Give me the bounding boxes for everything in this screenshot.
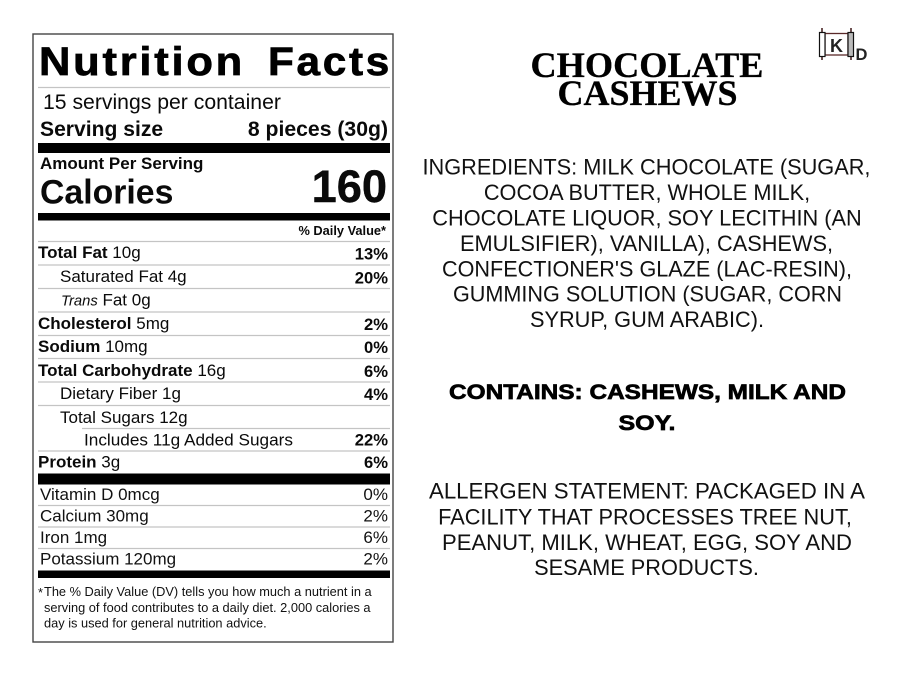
row: iron [40, 528, 388, 547]
servings per container: 15 servings per container [43, 91, 281, 114]
row: trans fat: Trans Fat 0g [61, 290, 151, 310]
heading: Nutrition Facts: Nutrition [39, 40, 245, 84]
row: potassium: 2% [363, 550, 388, 568]
amount per serving: Amount Per Serving [40, 154, 203, 173]
footnote: serving of food contributes to a daily diet. 2,000 calories a [44, 600, 371, 615]
text block: contains allergens: SOY. [618, 411, 676, 435]
row: sodium [38, 337, 388, 357]
footnote: * [38, 585, 43, 600]
title: Chocolate Cashews [530, 45, 764, 113]
serving size row [40, 118, 388, 141]
row: vitamin D [40, 485, 388, 504]
row: calcium [40, 506, 388, 526]
row: total fat: 13% [355, 244, 388, 264]
row: total sugars: Total Sugars 12g [60, 408, 188, 427]
text block: ingredients: CONFECTIONER'S GLAZE (LAC-RESIN), [442, 256, 852, 281]
heading: Nutrition Facts [39, 40, 392, 84]
text block: ingredients: COCOA BUTTER, WHOLE MILK, [484, 180, 810, 205]
row: dietary fiber: 4% [364, 385, 388, 404]
text block: allergen statement: SESAME PRODUCTS. [534, 555, 759, 580]
row: total carbohydrate: 6% [364, 362, 388, 381]
calories row: 160 [312, 161, 387, 212]
daily value heading: % Daily Value* [298, 223, 386, 238]
row: protein: Protein 3g [38, 452, 120, 472]
row: total carbohydrate: Total Carbohydrate 16g [38, 361, 226, 380]
row: total fat: Total Fat 10g [38, 243, 141, 262]
serving size row: 8 pieces (30g) [248, 118, 388, 141]
row: potassium: Potassium 120mg [40, 550, 176, 568]
row: cholesterol: Cholesterol 5mg [38, 314, 169, 333]
text block: ingredients: CHOCOLATE LIQUOR, SOY LECITHIN (AN [432, 206, 862, 230]
footnote [38, 584, 373, 630]
row: saturated fat [60, 267, 388, 288]
title: Chocolate Cashews: CASHEWS [558, 73, 738, 113]
text block: ingredients [423, 154, 870, 332]
text block: contains allergens: CONTAINS: CASHEWS, MILK AND [449, 380, 846, 404]
row: added sugars: 22% [355, 430, 388, 450]
footnote: The % Daily Value (DV) tells you how much a nutrient in a [44, 584, 373, 599]
icon: kosher dairy symbol: K [830, 36, 843, 56]
row: iron: 6% [363, 528, 388, 547]
text block: allergen statement [429, 478, 865, 580]
row: added sugars [84, 430, 388, 450]
row: dietary fiber: Dietary Fiber 1g [60, 384, 181, 403]
row: dietary fiber [60, 384, 388, 404]
row: total carbohydrate [38, 361, 388, 381]
calories row [40, 161, 387, 212]
footnote: day is used for general nutrition advice. [44, 616, 267, 630]
text block: contains allergens [449, 380, 846, 435]
text block: allergen statement: FACILITY THAT PROCESSES TREE NUT, [438, 504, 852, 530]
text block: ingredients: EMULSIFIER), VANILLA), CASHEWS, [460, 231, 833, 256]
row: total fat [38, 243, 388, 264]
row: potassium [40, 550, 388, 568]
text block: allergen statement: PEANUT, MILK, WHEAT, EGG, SOY AND [442, 530, 852, 555]
row: sodium: Sodium 10mg [38, 337, 148, 356]
title: Chocolate Cashews: CHOCOLATE [530, 45, 764, 85]
row: cholesterol: 2% [364, 315, 388, 334]
heading: Nutrition Facts: Facts [268, 40, 392, 84]
row: calcium: 2% [363, 506, 388, 526]
icon: kosher dairy symbol: D [856, 46, 868, 64]
icon: kosher dairy symbol [820, 28, 868, 64]
row: protein: 6% [364, 453, 388, 472]
row: saturated fat: Saturated Fat 4g [60, 267, 187, 286]
row: protein [38, 452, 388, 472]
row: iron: Iron 1mg [40, 528, 107, 547]
row: vitamin D: Vitamin D 0mcg [40, 485, 160, 504]
row: vitamin D: 0% [363, 485, 388, 504]
calories row: Calories [40, 174, 173, 212]
text block: ingredients: INGREDIENTS: MILK CHOCOLATE (SUGAR, [423, 154, 870, 179]
row: sodium: 0% [364, 338, 388, 357]
row: cholesterol [38, 314, 388, 334]
text block: ingredients: SYRUP, GUM ARABIC). [530, 307, 764, 332]
text block: ingredients: GUMMING SOLUTION (SUGAR, CORN [453, 282, 842, 306]
text block: allergen statement: ALLERGEN STATEMENT: PACKAGED IN A [429, 478, 865, 504]
serving size row: Serving size [40, 118, 163, 141]
row: saturated fat: 20% [355, 268, 388, 288]
row: added sugars: Includes 11g Added Sugars [84, 430, 293, 450]
panel: nutrition facts label [33, 34, 393, 642]
row: calcium: Calcium 30mg [40, 506, 149, 526]
